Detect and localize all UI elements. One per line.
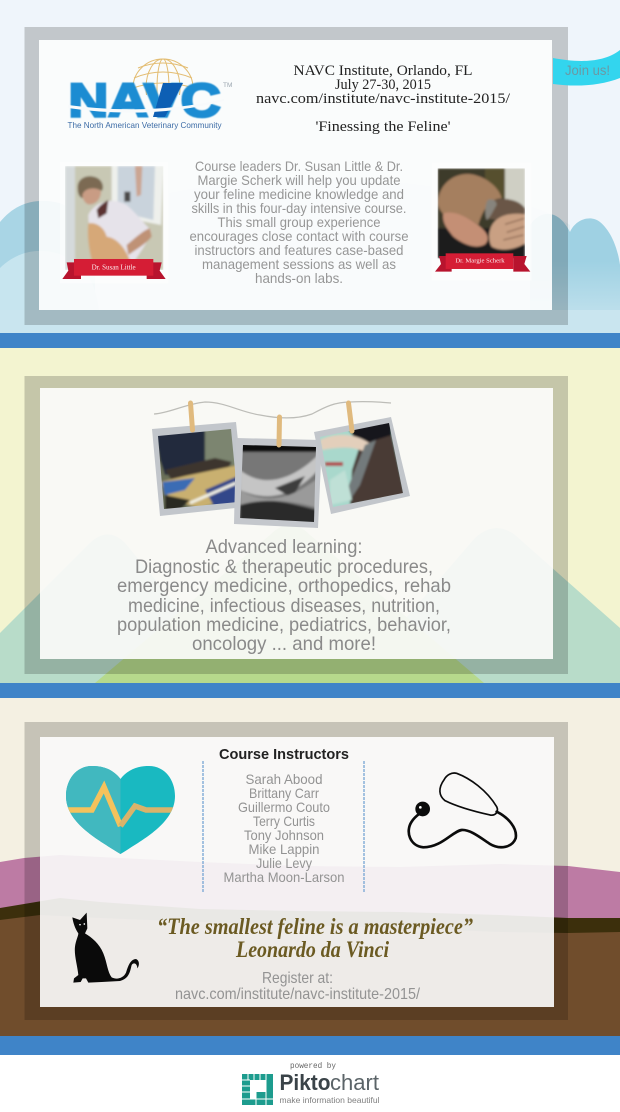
logo: NAVC: NAVC	[68, 74, 220, 126]
learning topics	[117, 536, 451, 655]
learning topics: oncology ... and more!	[192, 633, 376, 655]
course description: This small group experience	[218, 214, 381, 230]
panel: event details	[24, 27, 568, 325]
panel: advanced learning	[24, 376, 568, 674]
instructor names: Tony Johnson	[244, 827, 324, 843]
logo: NAVC: TM	[223, 82, 232, 89]
ribbon: Dr. Margie Scherk	[455, 257, 505, 264]
event heading: 'Finessing the Feline'	[316, 119, 451, 135]
panel surface	[40, 737, 554, 1007]
course description: encourages close contact with course	[190, 228, 409, 244]
portrait: Dr. Margie Scherk	[435, 168, 530, 272]
instructor names: Martha Moon-Larson	[224, 869, 344, 885]
course description: Margie Scherk will help you update	[198, 172, 401, 188]
wordmark	[280, 1070, 380, 1105]
learning topics: Advanced learning:	[206, 536, 362, 558]
photo: radiograph	[234, 438, 322, 528]
section background: landscape	[0, 698, 620, 1036]
icon: black cat	[72, 913, 139, 983]
blue band 2	[0, 683, 620, 698]
panel frame	[24, 27, 568, 325]
callout: join us	[553, 50, 620, 86]
panel surface	[40, 388, 553, 659]
event heading: July 27-30, 2015	[335, 77, 431, 93]
learning topics: Diagnostic & therapeutic procedures,	[135, 556, 433, 578]
course description	[190, 158, 409, 286]
blue band 3	[0, 1036, 620, 1055]
logo: NAVC	[68, 59, 232, 130]
instructor names: Mike Lappin	[248, 841, 320, 857]
learning topics: medicine, infectious diseases, nutrition,	[128, 595, 440, 617]
footer: Piktochart	[0, 1055, 620, 1112]
instructor names: Sarah Abood	[246, 771, 322, 787]
course description: hands-on labs.	[255, 270, 343, 286]
course description: skills in this four-day intensive course.	[192, 200, 406, 216]
divider left	[202, 761, 204, 893]
quote: Leonardo da Vinci	[235, 937, 390, 962]
learning topics: population medicine, pediatrics, behavior,	[117, 614, 451, 636]
photo: surgery table	[150, 422, 245, 516]
clothespins	[190, 403, 352, 445]
panel frame	[24, 376, 568, 674]
event heading: NAVC Institute, Orlando, FL	[294, 63, 472, 79]
wordmark: make information beautiful	[280, 1095, 380, 1105]
course description: instructors and features case-based	[194, 242, 404, 258]
callout: join us: Join us!	[565, 62, 610, 78]
event heading	[256, 63, 511, 135]
registration link: Register at:	[262, 970, 333, 987]
instructors heading: Course Instructors	[219, 746, 349, 763]
registration link: navc.com/institute/navc-institute-2015/	[175, 986, 420, 1003]
instructor names: Terry Curtis	[253, 813, 315, 829]
icon: stethoscope	[409, 773, 516, 847]
event heading: navc.com/institute/navc-institute-2015/	[256, 91, 511, 107]
clothesline	[154, 402, 391, 418]
learning topics: emergency medicine, orthopedics, rehab	[117, 575, 451, 597]
panel: course instructors	[24, 722, 568, 1020]
photo: examination	[314, 417, 410, 514]
powered by: powered by	[290, 1061, 336, 1071]
photo collage on a clothesline	[150, 402, 410, 528]
course description: management sessions as well as	[202, 256, 396, 272]
blue band 1	[0, 333, 620, 348]
registration link	[175, 970, 420, 1003]
section background: sky with clouds	[0, 0, 620, 333]
quote: “The smallest feline is a masterpiece”	[157, 914, 473, 939]
instructor names	[224, 771, 344, 885]
quote	[157, 914, 473, 962]
icon: heart with pulse	[60, 766, 180, 854]
section background: hills	[0, 348, 620, 683]
wordmark: Pikto	[280, 1070, 330, 1095]
divider right	[363, 761, 365, 893]
instructor names: Julie Levy	[256, 855, 312, 871]
wordmark: chart	[330, 1070, 379, 1095]
logo: NAVC: The North American Veterinary Community	[68, 120, 222, 130]
icon: Piktochart mark	[242, 1074, 273, 1105]
course description: your feline medicine knowledge and	[194, 186, 404, 202]
portrait: Dr. Susan Little	[62, 166, 166, 279]
panel frame	[24, 722, 568, 1020]
instructor names: Brittany Carr	[249, 785, 319, 801]
ribbon: Dr. Susan Little	[92, 263, 136, 271]
instructor names: Guillermo Couto	[238, 799, 330, 815]
course description: Course leaders Dr. Susan Little & Dr.	[195, 158, 403, 174]
panel surface	[39, 40, 552, 310]
